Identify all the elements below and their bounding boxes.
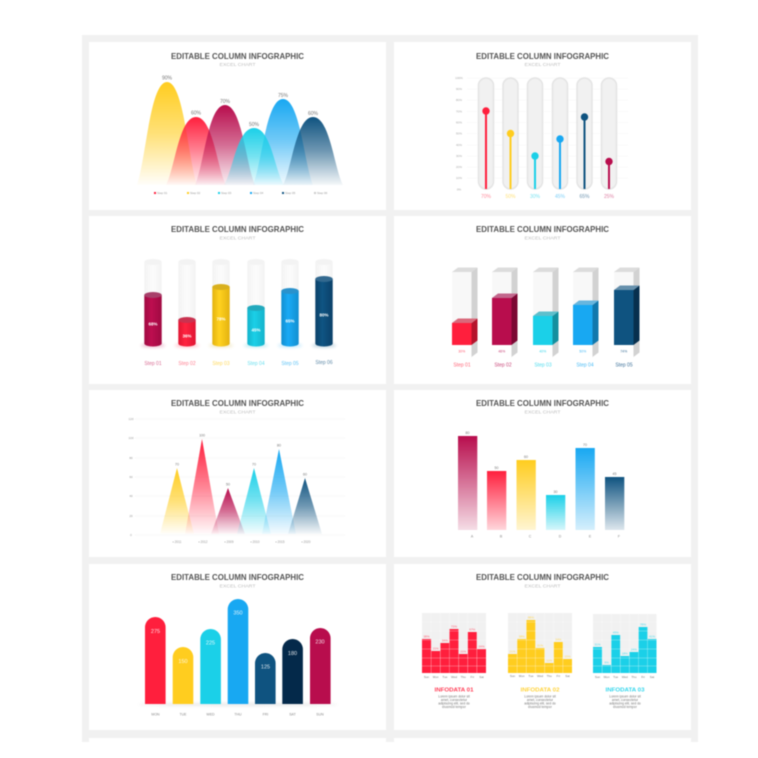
legend: • 2012 — [198, 540, 208, 544]
percentage labels: 68% — [148, 322, 158, 326]
y axis labels: 10% — [456, 176, 462, 180]
infodata 03 text: amet, consectetur — [612, 698, 639, 702]
infodata 01 text: amet, consectetur — [441, 698, 468, 702]
value labels: 80 — [277, 444, 281, 448]
value labels: 70 — [583, 443, 587, 447]
track pills — [478, 78, 616, 189]
infodata 01 text: Lorem ipsum dolor sit — [438, 694, 470, 698]
day labels — [151, 712, 324, 716]
value labels: 70 — [175, 462, 179, 466]
y axis labels: 80% — [456, 98, 462, 102]
panel: lollipop chart — [394, 42, 691, 210]
legend: Step 03 — [221, 191, 232, 195]
legend: Step 06 — [317, 191, 328, 195]
value labels: 50 — [226, 482, 230, 486]
legend: • 2015 — [275, 540, 285, 544]
box 3 — [533, 268, 558, 357]
value labels: 70 — [252, 462, 256, 466]
legend: • 2011 — [173, 540, 182, 544]
y axis labels: 40 — [129, 494, 133, 498]
value labels — [481, 194, 615, 200]
subtitle: EXCEL CHART — [220, 62, 256, 67]
legend: Step 01 — [157, 191, 168, 195]
chart: infodata 01: 38% — [423, 634, 430, 638]
y axis labels: 20 — [129, 514, 133, 518]
filled cylinders — [144, 276, 333, 346]
panel: cylinder chart — [89, 216, 386, 384]
subtitle: EXCEL CHART — [220, 410, 256, 414]
box 5 — [614, 268, 640, 357]
step labels: Step 01 — [144, 361, 162, 367]
y axis labels: 60% — [456, 120, 462, 124]
y axis labels: 50% — [456, 132, 462, 136]
step labels: Step 03 — [534, 362, 552, 368]
panel: 3D box chart — [394, 216, 691, 384]
chart: infodata 01: Sat — [479, 675, 484, 679]
y axis labels: 60 — [129, 475, 133, 479]
chart: infodata 01: Mon — [433, 675, 439, 679]
y axis labels: 30% — [456, 154, 462, 158]
title: EDITABLE COLUMN INFOGRAPHIC — [171, 572, 304, 582]
title: EDITABLE COLUMN INFOGRAPHIC — [476, 572, 609, 582]
percentage labels: 36% — [182, 334, 192, 338]
chart: infodata 01: 34% — [442, 638, 448, 642]
infodata 01 text — [434, 688, 474, 709]
day labels: FRI — [263, 712, 268, 716]
chart: infodata 01: Fri — [471, 675, 474, 679]
y axis labels: 90% — [456, 87, 462, 91]
y axis labels: 120 — [128, 417, 134, 421]
subtitle: EXCEL CHART — [524, 410, 561, 414]
box 4 — [573, 268, 598, 357]
chart: infodata 03 — [593, 614, 656, 679]
step labels: Step 04 — [576, 362, 594, 368]
value labels — [175, 434, 307, 486]
percentage labels: 78% — [216, 316, 226, 322]
base shadows — [141, 344, 336, 347]
value labels: 50% — [505, 194, 516, 200]
y axis labels — [128, 417, 134, 537]
title: EDITABLE COLUMN INFOGRAPHIC — [476, 398, 609, 408]
chart: infodata 02: Wed — [537, 674, 543, 678]
chart: infodata 02 — [508, 613, 572, 678]
step labels: Step 01 — [453, 362, 471, 368]
chart: infodata 03: Sun — [595, 675, 600, 679]
category labels — [471, 534, 620, 538]
panel: gradient bar chart — [394, 390, 691, 557]
chart: infodata 02: Sat — [565, 674, 570, 678]
box 1 — [452, 268, 478, 357]
infodata 02 text: Lorem ipsum dolor sit — [524, 694, 556, 698]
title: EDITABLE COLUMN INFOGRAPHIC — [171, 224, 304, 234]
category labels: F — [618, 534, 620, 538]
triangles — [160, 439, 322, 534]
value labels — [151, 610, 325, 670]
chart: infodata 02: Tue — [528, 674, 534, 678]
box 3: 40% — [539, 350, 546, 354]
infodata 02 text: adipiscing elit, sed do — [524, 702, 556, 706]
value labels: 75% — [278, 93, 289, 99]
subtitle: EXCEL CHART — [220, 584, 256, 588]
category labels: A — [471, 534, 474, 538]
chart: infodata 02: Thu — [547, 674, 552, 678]
chart: infodata 01: 73% — [451, 624, 457, 628]
value labels — [466, 431, 616, 494]
value labels: 60% — [308, 111, 319, 117]
chart: infodata 03: Sat — [650, 675, 654, 679]
step labels — [144, 360, 333, 367]
value labels: 150 — [178, 659, 188, 665]
box 2 — [492, 268, 518, 357]
day labels: MON — [151, 712, 160, 716]
y axis labels: 70% — [456, 110, 462, 114]
value labels: 125 — [261, 664, 270, 670]
chart: infodata 02: 11% — [546, 658, 552, 662]
box 5: 74% — [620, 350, 627, 354]
value labels: 80 — [466, 431, 469, 435]
legend — [173, 540, 311, 544]
empty cylinders — [144, 259, 333, 322]
chart: infodata 03: 41% — [649, 634, 655, 638]
value labels: 45% — [555, 194, 566, 200]
box 4: 50% — [579, 350, 586, 354]
rounded bars — [145, 599, 331, 704]
infodata 02 text: eiusmod tempor — [528, 705, 553, 709]
value labels: 30 — [554, 490, 557, 494]
percentage labels: 45% — [251, 328, 261, 332]
day labels: THU — [234, 712, 242, 716]
bell curves — [137, 82, 343, 185]
subtitle: EXCEL CHART — [524, 62, 561, 67]
infodata 01 text: INFODATA 01 — [434, 688, 474, 694]
value labels: 45 — [613, 472, 616, 476]
step labels: Step 03 — [212, 361, 230, 367]
chart: infodata 03: 18% — [622, 652, 628, 656]
box 2: 46% — [498, 350, 505, 354]
value labels: 230 — [315, 640, 325, 646]
lollipops — [482, 107, 613, 189]
infodata 03 text: adipiscing elit, sed do — [609, 702, 641, 706]
legend: Step 02 — [190, 191, 201, 195]
value labels: 70% — [481, 194, 492, 200]
legend: Step 04 — [253, 191, 264, 195]
infodata 03 text — [606, 688, 644, 709]
percentage labels — [148, 312, 329, 338]
panel: grid column charts — [394, 564, 691, 730]
chart: infodata 01: 21% — [433, 646, 439, 650]
chart: infodata 01: 24% — [478, 644, 485, 648]
y axis labels — [455, 76, 463, 192]
chart: infodata 03: 24% — [631, 648, 637, 652]
y axis labels: 0 — [130, 533, 132, 537]
chart: infodata 02: 15% — [564, 654, 571, 658]
legend: • 2020 — [301, 540, 311, 544]
chart: infodata 03: Wed — [622, 675, 628, 679]
chart: infodata 02: Fri — [557, 674, 560, 678]
chart: infodata 03: 45% — [613, 630, 619, 634]
value labels: 65% — [579, 194, 590, 200]
chart: infodata 01: Sun — [424, 675, 429, 679]
chart: infodata 03: 31% — [594, 642, 601, 646]
bars — [458, 436, 624, 530]
infodata 03 text: Lorem ipsum dolor sit — [609, 694, 641, 698]
day labels: SAT — [289, 712, 297, 716]
y axis labels: 80 — [129, 456, 133, 460]
chart: infodata 01: Wed — [451, 675, 457, 679]
day labels: TUE — [180, 712, 187, 716]
legend: • 2010 — [250, 540, 260, 544]
title: EDITABLE COLUMN INFOGRAPHIC — [476, 51, 609, 61]
chart: infodata 03: 78% — [640, 622, 646, 626]
infodata 01 text: adipiscing elit, sed do — [438, 702, 470, 706]
value labels: 225 — [206, 640, 215, 646]
value labels: 60 — [303, 472, 307, 476]
title: EDITABLE COLUMN INFOGRAPHIC — [171, 51, 304, 61]
category labels: B — [500, 534, 503, 538]
chart: infodata 02: Sun — [510, 674, 515, 678]
title: EDITABLE COLUMN INFOGRAPHIC — [171, 398, 304, 408]
panels: cropped next row — [89, 738, 691, 742]
chart: infodata 01: Tue — [442, 675, 448, 679]
chart: infodata 02: 34% — [555, 638, 562, 642]
y axis labels: 100 — [128, 436, 134, 440]
value labels: 60 — [524, 455, 528, 459]
chart: infodata 03: Mon — [604, 675, 610, 679]
day labels: WED — [206, 712, 215, 716]
chart: infodata 02: 31% — [537, 644, 543, 648]
percentage labels: 65% — [285, 318, 295, 324]
value labels: 100 — [199, 434, 205, 438]
panel: rounded bar chart — [89, 564, 386, 730]
infodata 03 text: INFODATA 03 — [606, 688, 644, 694]
infodata 02 text: INFODATA 02 — [520, 688, 560, 694]
step labels: Step 06 — [315, 360, 333, 366]
value labels: 25% — [604, 194, 615, 200]
subtitle: EXCEL CHART — [524, 236, 561, 240]
page background — [82, 35, 698, 742]
infodata 02 text — [520, 688, 560, 709]
value labels: 350 — [233, 610, 243, 616]
y axis labels: 100% — [455, 76, 463, 80]
step labels: Step 04 — [247, 361, 265, 367]
step labels — [453, 362, 633, 368]
title: EDITABLE COLUMN INFOGRAPHIC — [476, 224, 609, 234]
category labels: E — [589, 534, 592, 538]
y axis labels: 40% — [456, 143, 462, 147]
chart: infodata 01: 67% — [469, 628, 476, 632]
step labels: Step 02 — [494, 362, 512, 368]
baseline shadow — [138, 704, 338, 706]
panel: bell curve chart — [89, 42, 386, 210]
step labels: Step 05 — [281, 361, 299, 367]
value labels: 70% — [220, 99, 231, 105]
chart: infodata 03: Thu — [631, 675, 637, 679]
value labels: 275 — [151, 629, 160, 635]
chart: infodata 02: 21% — [509, 650, 516, 654]
infodata 03 text: eiusmod tempor — [613, 705, 638, 709]
chart: infodata 02: 88% — [528, 616, 534, 620]
value labels: 60% — [191, 110, 202, 116]
chart: infodata 02: 38% — [519, 634, 525, 638]
chart: infodata 02: Mon — [519, 674, 525, 678]
value labels: 50 — [495, 466, 498, 470]
infodata 01 text: eiusmod tempor — [442, 705, 467, 709]
chart: infodata 03: Tue — [613, 675, 619, 679]
value labels — [162, 76, 319, 128]
chart: infodata 01: Thu — [461, 675, 466, 679]
chart: infodata 03: Fri — [641, 675, 645, 679]
day labels: SUN — [316, 712, 324, 716]
chart: infodata 03: 9% — [604, 660, 609, 664]
value labels: 90% — [162, 76, 173, 82]
y axis labels: 0% — [457, 188, 461, 192]
panel: triangle chart — [89, 390, 386, 557]
step labels: Step 02 — [178, 361, 196, 367]
y axis labels: 20% — [456, 165, 462, 169]
value labels: 50% — [249, 122, 260, 128]
chart: infodata 01: 21% — [460, 650, 467, 654]
box 1: 30% — [458, 350, 465, 354]
value labels: 30% — [530, 194, 541, 200]
legend: Step 05 — [285, 191, 296, 195]
step labels: Step 05 — [615, 362, 633, 368]
category labels: D — [559, 534, 562, 538]
legend: • 2009 — [224, 540, 234, 544]
category labels: C — [529, 534, 532, 538]
value labels: 180 — [288, 651, 297, 657]
subtitle: EXCEL CHART — [524, 584, 561, 588]
legend — [154, 191, 328, 195]
chart: infodata 01 — [422, 613, 486, 679]
infodata 02 text: amet, consectetur — [527, 698, 554, 702]
percentage labels: 80% — [319, 312, 329, 318]
subtitle: EXCEL CHART — [220, 236, 256, 240]
